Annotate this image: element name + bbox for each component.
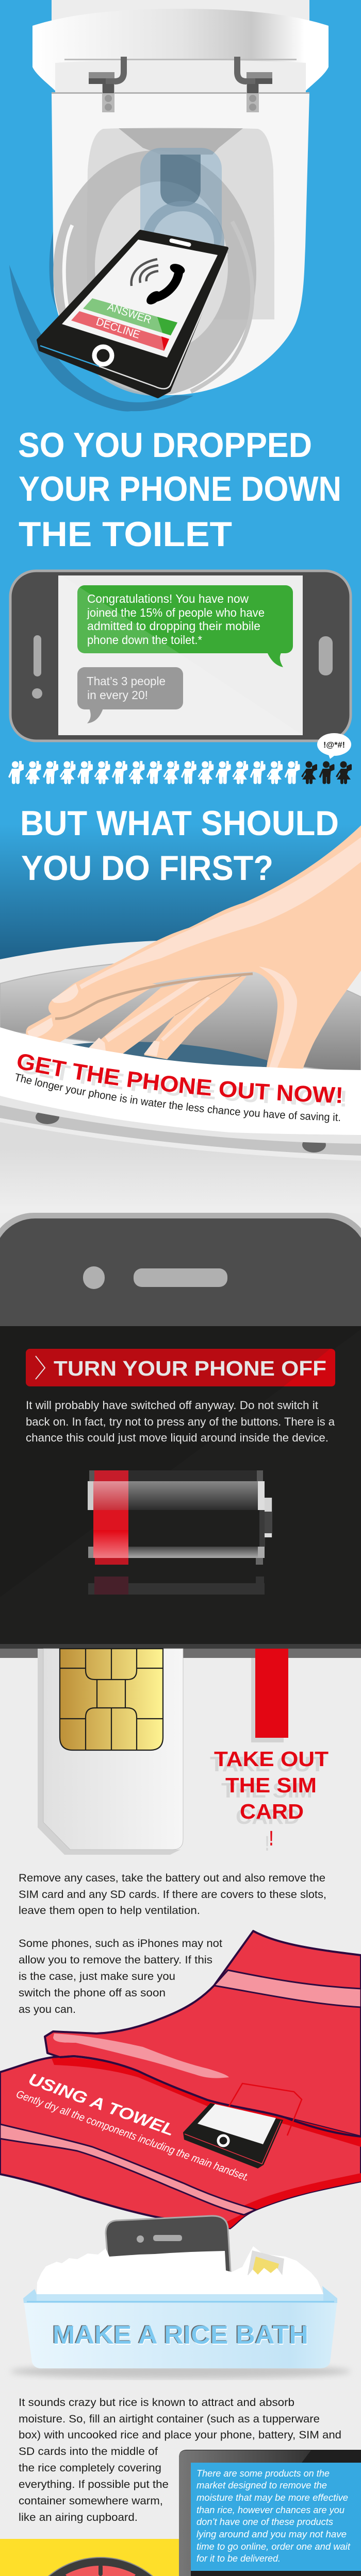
people row: 3 in 20 (8, 761, 352, 784)
paragraph: iPhones: as you can. (19, 2004, 76, 2015)
toilet rim and panel (0, 941, 361, 1326)
SIM body (43, 1649, 183, 1850)
index finger shadow (55, 974, 253, 1019)
call icon handset (144, 262, 186, 307)
speech bubble with swearing: !@*#! (323, 741, 345, 750)
laptop text: There are some products on the (196, 2468, 330, 2479)
heading: take out the SIM card: TAKE OUT (214, 1747, 329, 1771)
grey message bubble: in every 20! (87, 688, 148, 702)
paragraph: iPhones: switch the phone off as soon (19, 1987, 166, 1999)
basin (0, 963, 361, 1074)
laptop text: lying around and you may not have (196, 2529, 347, 2539)
gold chip (60, 1649, 163, 1750)
area beneath seat (55, 59, 306, 93)
towel lower sheet (0, 2056, 361, 2228)
clock rim (19, 2557, 182, 2576)
panel: black section (0, 1326, 361, 1644)
phone edge highlight (99, 253, 227, 389)
laptop text: for it to be delivered. (196, 2553, 281, 2564)
paragraph: turn off: back on. In fact, try not to press any of the buttons. There is a (26, 1415, 335, 1428)
camera (83, 1266, 105, 1289)
paragraph: rice: It sounds crazy but rice is known to attract and absorb (19, 2397, 294, 2409)
illustration: SIM card (38, 1649, 183, 1855)
heading: take out the SIM card: CARD (240, 1800, 304, 1823)
grey message bubble: That’s 3 people (87, 674, 166, 688)
paragraph: iPhones (19, 1938, 222, 2015)
answer bar tip (157, 317, 177, 335)
heading: take out the SIM card (210, 1747, 329, 1855)
call signal arcs (132, 259, 158, 286)
illustration: hand reaching into toilet (0, 825, 361, 1326)
tub shadow (10, 2364, 351, 2379)
illustration: towel (0, 1931, 361, 2228)
heading: take out the SIM card: ! (265, 1832, 269, 1855)
seam line (52, 92, 309, 94)
paragraph: iPhones: is the case, just make sure you (19, 1971, 175, 1982)
laptop text: than rice, however chances are you (196, 2504, 344, 2515)
bowl back wall (87, 128, 274, 319)
rice pile (37, 2246, 323, 2294)
paragraph: rice: SD cards into the middle of (19, 2446, 158, 2458)
water channel light (140, 148, 222, 256)
arm and palm (48, 825, 361, 1069)
paragraph: iPhones: Some phones, such as iPhones may not (19, 1938, 222, 1950)
icon: 24 hour clock (48, 2557, 153, 2576)
towel upper stripe (214, 1970, 361, 2007)
speaker (169, 238, 191, 247)
hinge left (89, 57, 124, 112)
heading: but what should you do first: BUT WHAT SHOULD (20, 804, 339, 843)
home button (94, 347, 112, 364)
clock ticks (28, 2567, 173, 2576)
paragraph: remove cases (19, 1872, 326, 1917)
heading: so you dropped (18, 426, 341, 554)
SIM in rice (247, 2250, 284, 2277)
water channel dark (160, 155, 201, 207)
tub label: MAKE A RICE BATH (53, 2321, 309, 2350)
decline bar (71, 311, 169, 351)
red bar shadow (251, 1658, 284, 1742)
fold outline (60, 2056, 361, 2137)
answer bar (83, 298, 177, 335)
red banner: turn your phone off (26, 1349, 335, 1386)
seat shadow left (39, 63, 55, 88)
illustration: phone in rice bath (10, 2216, 351, 2379)
laptop text: market designed to remove the (196, 2480, 327, 2490)
illustration: laptop callout (169, 2450, 361, 2576)
band shadow text: GET THE PHONE OUT NOW! (22, 1058, 346, 1107)
icon: low battery (88, 1470, 272, 1595)
laptop screen (191, 2463, 361, 2571)
paragraph: rice (19, 2397, 341, 2523)
home button right (319, 636, 333, 675)
phone on towel (183, 2103, 283, 2168)
paragraph: rice: everything. If possible put the (19, 2479, 169, 2490)
white curved band (0, 1027, 361, 1135)
panel below curved band (0, 1095, 361, 1213)
shadow beside toilet base (50, 224, 64, 322)
hinge right (237, 57, 272, 112)
phone edge blue (40, 346, 99, 366)
message text: Congratulations! You have now (87, 592, 249, 605)
paragraph: rice: container somewhere warm, (19, 2495, 163, 2507)
laptop text: don’t have one of these products (196, 2516, 333, 2527)
camera (32, 688, 42, 699)
fingers behind (26, 976, 247, 1059)
thumb highlight (259, 967, 297, 1067)
band heading: GET THE PHONE OUT NOW! (18, 1054, 341, 1103)
paragraph: turn off (26, 1399, 335, 1444)
heading: take out the SIM card: TAKE OUT (210, 1752, 324, 1776)
screen (58, 575, 303, 735)
heading: but what should you do first (20, 804, 339, 888)
heading: take out the SIM card: CARD (236, 1805, 300, 1828)
heading: so you dropped: THE TOILET (19, 515, 232, 554)
lid edge top (179, 2450, 311, 2576)
tub rim line (27, 2301, 334, 2302)
paragraph: iPhones: allow you to remove the battery. If this (19, 1954, 212, 1966)
tub label: MAKE A RICE BATH (52, 2320, 307, 2349)
panel: light grey section (0, 1644, 361, 2539)
banner: get the phone out now (0, 1027, 361, 1135)
paragraph: rice: box) with uncooked rice and place your phone, battery, SIM and (19, 2429, 341, 2441)
laptop lid (179, 2450, 361, 2576)
speaker (134, 1268, 227, 1287)
toilet tank (52, 0, 309, 31)
seat shadow right (306, 63, 322, 88)
phone in toilet (38, 231, 227, 397)
rim shadow arcs (191, 222, 252, 392)
laptop text: time to go online, order one and wait (196, 2541, 351, 2552)
towel heading: USING A TOWEL (26, 2070, 177, 2139)
tub label: MAKE A RICE BATH (53, 2320, 308, 2349)
bowl back centre shadow (119, 128, 243, 155)
message text (87, 592, 265, 647)
bowl inner (95, 181, 228, 351)
paragraph: turn off: chance this could just move liquid around inside the device. (26, 1431, 329, 1444)
landscape phone with messages (10, 571, 351, 741)
toilet base (52, 94, 309, 395)
phone body (38, 231, 227, 397)
paragraph: remove cases: leave them open to help ventilation. (19, 1905, 200, 1917)
lid lip line (64, 59, 297, 60)
red banner: turn your phone off: TURN YOUR PHONE OFF (54, 1357, 326, 1380)
paragraph: remove cases: SIM card and any SD cards. If there are covers to these slots, (19, 1889, 326, 1901)
panel: yellow section (0, 2539, 361, 2576)
phone body (10, 571, 351, 741)
tub body (24, 2300, 337, 2368)
heading: take out the SIM card: THE SIM (221, 1778, 313, 1802)
index nail (52, 984, 78, 1003)
towel dark red lower right (217, 2173, 361, 2228)
toilet lid (32, 9, 329, 91)
green message bubble (77, 585, 293, 667)
decline bar tip (161, 336, 169, 351)
towel subtext: Gently dry all the components including the main handset. (14, 2088, 251, 2184)
message text: phone down the toilet.* (87, 633, 202, 647)
answer label: ANSWER (106, 301, 153, 326)
drain ring (147, 206, 219, 278)
clock face (27, 2566, 174, 2576)
heading: take out the SIM card: ! (269, 1826, 273, 1850)
illustration: toilet seen from above (9, 0, 329, 412)
towel shadow under fold (52, 2058, 361, 2147)
tub rim (23, 2286, 337, 2303)
battery reflection (88, 1583, 265, 1595)
tub rim band (37, 2294, 323, 2301)
band subtext: The longer your phone is in water the less chance you have of saving it. (15, 1073, 340, 1123)
shadow crescent around toilet bowl (9, 265, 193, 412)
heading: but what should you do first: YOU DO FIRST? (21, 849, 273, 888)
towel upper sheet (45, 1931, 361, 2137)
bowl seat outer ring (53, 150, 256, 396)
phone in rice (106, 2216, 231, 2272)
rim highlight arcs (64, 225, 93, 371)
phone top (0, 1213, 361, 1368)
background: blue sky gradient (0, 0, 361, 979)
heading: so you dropped: SO YOU DROPPED (18, 426, 312, 465)
paragraph: rice: like an airing cupboard. (19, 2512, 138, 2523)
decline label: DECLINE (94, 316, 141, 341)
phone imprint under towel (225, 2083, 302, 2136)
tendon line (175, 974, 245, 1015)
towel lower stripe (0, 2124, 256, 2215)
paragraph: remove cases: Remove any cases, take the battery out and also remove the (19, 1872, 325, 1884)
heading: take out the SIM card: THE SIM (225, 1773, 317, 1797)
strip beneath black section (0, 1644, 361, 1658)
laptop text (196, 2468, 351, 2564)
paragraph: turn off: It will probably have switched off anyway. Do not switch it (26, 1399, 318, 1412)
red exclamation bar (255, 1649, 288, 1738)
SIM shadow (38, 1649, 180, 1855)
phone speaker (153, 2235, 182, 2241)
paragraph: rice: the rice completely covering (19, 2462, 161, 2474)
grey message bubble (77, 667, 183, 723)
phone screen (62, 240, 218, 358)
message text: admitted to dropping their mobile (87, 619, 260, 633)
paragraph: rice: moisture. So, fill an airtight container (such as a tupperware (19, 2413, 320, 2425)
phone camera (137, 2235, 144, 2243)
arm highlight (79, 837, 361, 989)
speaker left (34, 635, 41, 676)
message text: joined the 15% of people who have (87, 606, 265, 619)
laptop text: moisture that may be more effective (196, 2492, 348, 2503)
water (69, 1042, 267, 1072)
towel fold highlight (53, 2033, 229, 2078)
screen sheen (58, 575, 303, 735)
speech bubble with swearing (317, 733, 351, 759)
